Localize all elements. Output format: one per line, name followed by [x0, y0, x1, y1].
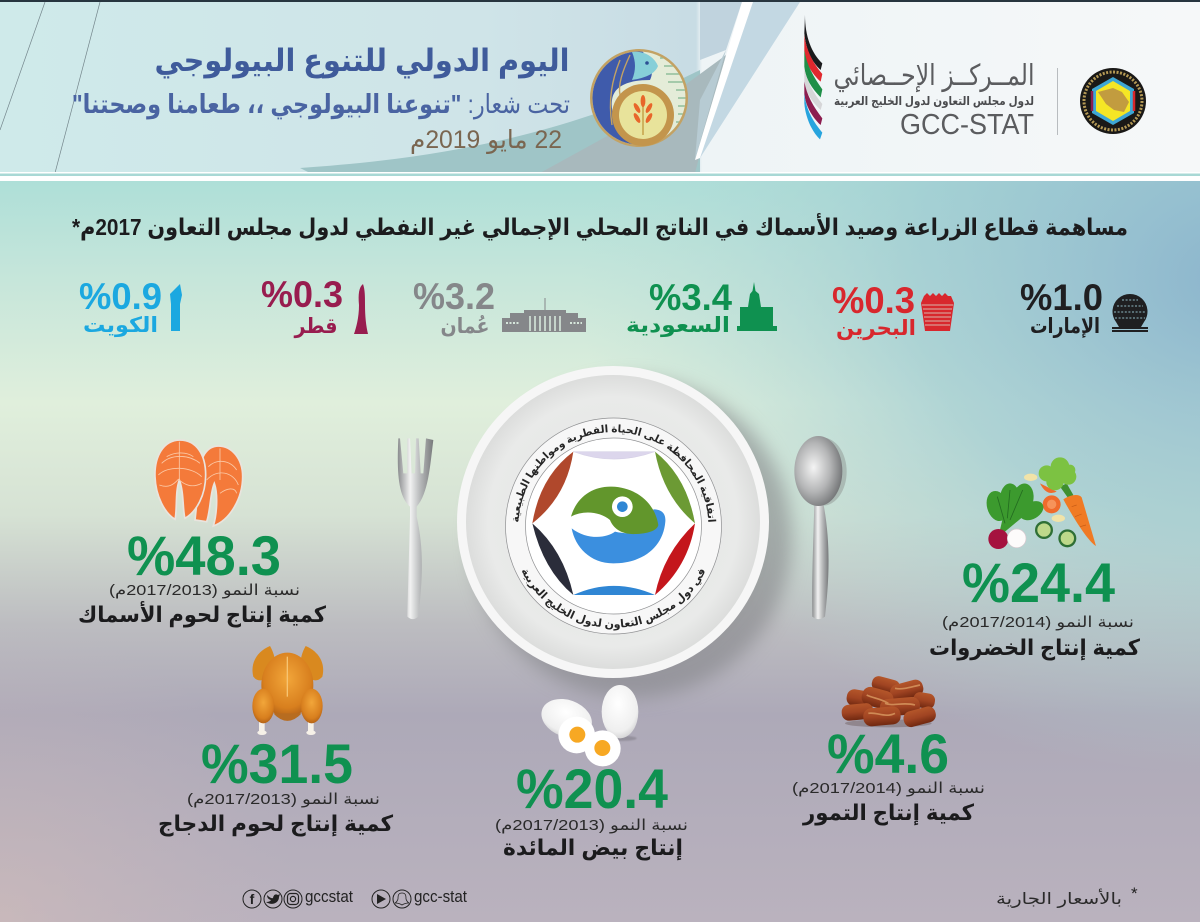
value: %4.6 — [827, 722, 949, 785]
date: 22 مايو 2019م — [410, 126, 562, 154]
subtitle theme: تحت شعار: "تنوعنا البيولوجي ،، طعامنا وصحتنا" — [72, 89, 570, 120]
icon: UAE dome — [1112, 294, 1148, 332]
growth period: نسبة النمو (2017/2013م) — [187, 791, 380, 808]
icon: GCC-STAT feather logo — [804, 15, 822, 139]
icon: Bahrain building — [921, 293, 954, 331]
icon: Saudi clock tower — [737, 282, 777, 331]
category: dates — [792, 675, 985, 826]
value: %20.4 — [516, 757, 668, 820]
value: %48.3 — [127, 524, 281, 587]
value: %24.4 — [962, 551, 1115, 614]
icon: spoon — [794, 436, 847, 619]
category: eggs — [495, 685, 688, 861]
stat: Kuwait: الكويت — [83, 314, 158, 337]
stat: Bahrain: البحرين — [836, 317, 916, 340]
value: %31.5 — [201, 732, 353, 795]
stat: Qatar — [261, 274, 368, 338]
icon: youtube — [372, 890, 390, 908]
footnote: بالأسعار الجارية — [996, 888, 1122, 909]
plate — [457, 366, 769, 678]
GCC-STAT logotype: المــركــز الإحــصائي — [834, 60, 1034, 93]
stat: UAE: %1.0 — [1020, 277, 1103, 318]
stat: Oman — [413, 276, 586, 338]
GCC-STAT logotype: GCC-STAT — [900, 109, 1034, 141]
icon: facebook — [243, 890, 261, 908]
icon: instagram — [284, 890, 302, 908]
footnote: * — [1131, 884, 1138, 903]
icon: GCC emblem — [1080, 68, 1146, 134]
plate shadow — [472, 378, 792, 698]
icon: biodiversity day logo — [589, 48, 690, 148]
stat: Kuwait — [79, 276, 182, 337]
growth period: نسبة النمو (2017/2014م) — [942, 614, 1134, 631]
social media footer — [243, 888, 467, 908]
stat: Oman: عُمان — [440, 314, 490, 338]
section heading: مساهمة قطاع الزراعة وصيد الأسماك في الناتج المحلي الإجمالي غير النفطي لدول مجلس التعاون 2017م* — [72, 212, 1128, 241]
logo ring text top: اتفاقية المحافظة على الحياة الفطرية ومواطنها الطبيعية — [513, 424, 716, 522]
icon: Qatar tower — [354, 284, 368, 334]
icon: Kuwait tower — [170, 284, 182, 331]
handle gccstat: gccstat — [305, 888, 353, 906]
growth period: نسبة النمو (2017/2014م) — [792, 780, 985, 797]
footnote — [996, 884, 1138, 909]
icon: eggs — [536, 685, 638, 766]
icon: twitter — [264, 890, 282, 908]
growth period: نسبة النمو (2017/2013م) — [495, 817, 688, 834]
stat: UAE: الإمارات — [1030, 315, 1100, 338]
stat: Qatar: %0.3 — [261, 274, 343, 315]
stat: Bahrain — [832, 280, 954, 340]
icon: salmon steaks — [155, 440, 243, 526]
icon: dates pile — [841, 675, 938, 729]
icon: facebook: f — [250, 891, 255, 907]
stat: Kuwait: %0.9 — [79, 276, 162, 317]
label: كمية إنتاج لحوم الأسماك — [78, 600, 326, 628]
logo hexagon and fish — [532, 452, 695, 595]
stat: Qatar: قطر — [294, 315, 338, 338]
stat: Saudi Arabia: السعودية — [626, 314, 730, 337]
label: إنتاج بيض المائدة — [503, 835, 683, 861]
header band — [0, 0, 1200, 181]
GCC-STAT logotype — [834, 60, 1034, 141]
category: chicken — [158, 646, 393, 837]
icon: roast chicken — [252, 646, 323, 735]
stat: Oman: %3.2 — [413, 276, 495, 317]
category: fish — [78, 440, 326, 628]
main title: اليوم الدولي للتنوع البيولوجي — [154, 43, 570, 79]
label: كمية إنتاج الخضروات — [929, 635, 1140, 661]
icon: vegetables — [983, 457, 1096, 549]
stat: Saudi Arabia: %3.4 — [649, 277, 732, 318]
growth period: نسبة النمو (2017/2013م) — [109, 582, 300, 599]
stat: Bahrain: %0.3 — [832, 280, 915, 321]
stat: UAE — [1020, 277, 1148, 338]
logo ring text bottom: في دول مجلس التعاون لدول الخليج العربية — [522, 570, 704, 631]
icon: fork — [398, 438, 433, 619]
icon: Oman palace — [502, 298, 586, 332]
label: كمية إنتاج التمور — [802, 800, 974, 826]
GCC-STAT logotype: لدول مجلس التعاون لدول الخليج العربية — [834, 94, 1034, 109]
stat: Saudi Arabia — [626, 277, 777, 337]
category: vegetables — [929, 457, 1140, 661]
convention logo — [505, 418, 722, 634]
handle gcc-stat: gcc-stat — [414, 888, 467, 906]
icon: snapchat — [393, 890, 411, 908]
label: كمية إنتاج لحوم الدجاج — [158, 811, 393, 837]
